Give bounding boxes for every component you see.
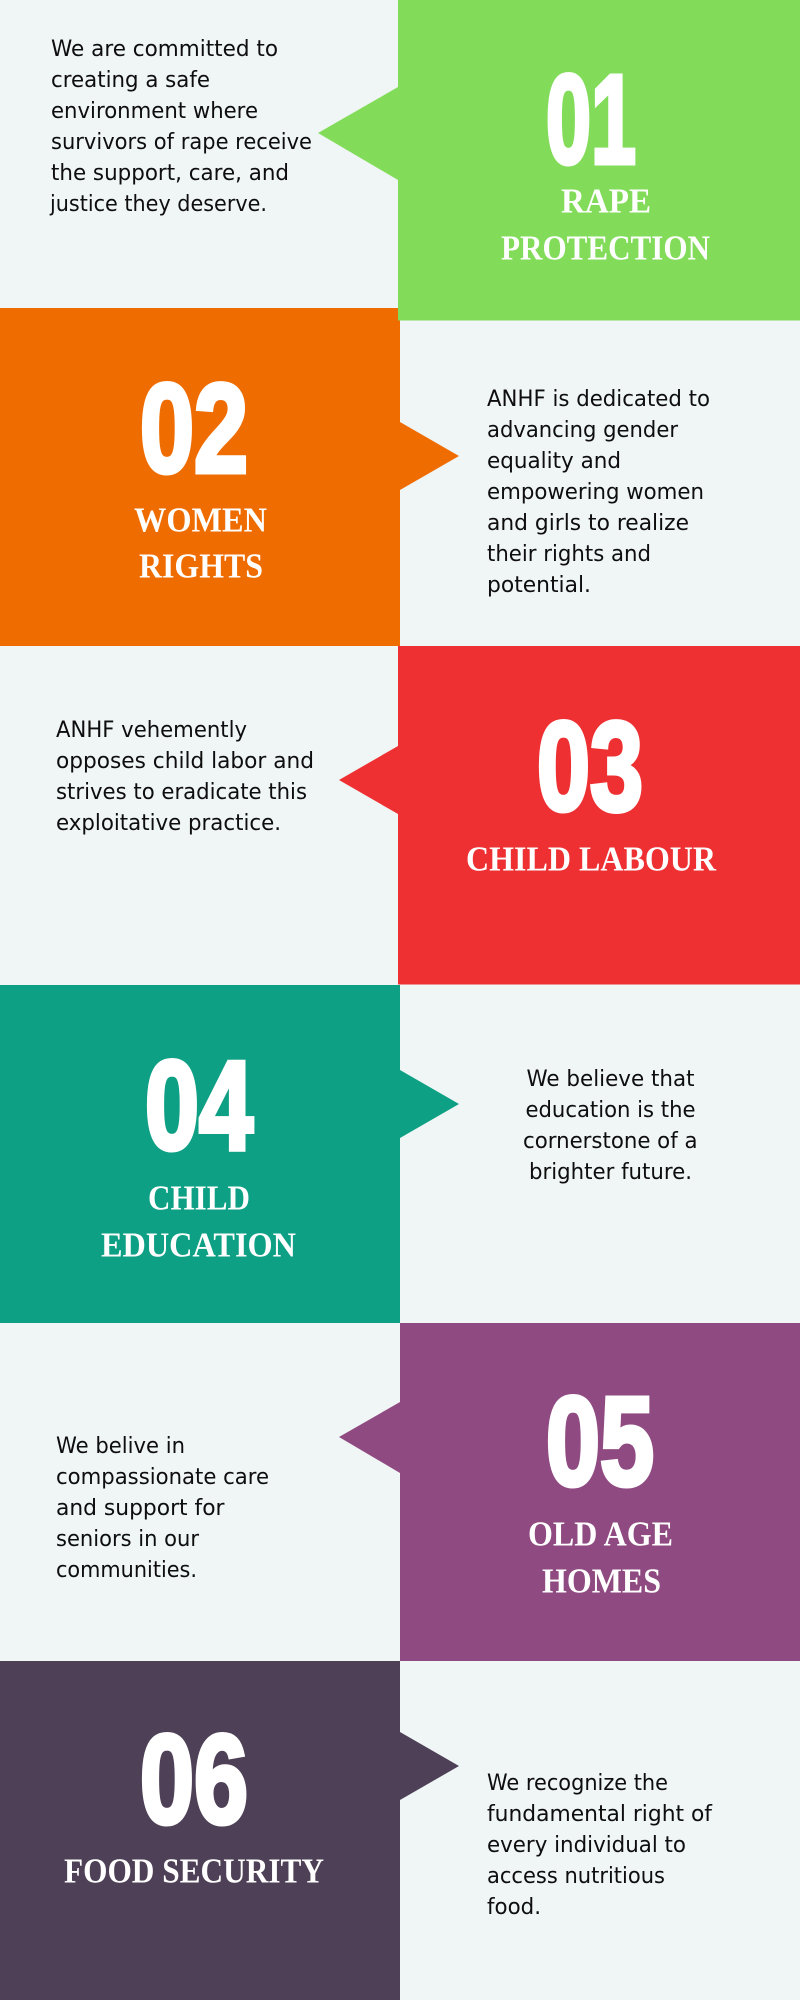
number 02: 02 xyxy=(140,358,248,499)
text block: women rights description: their rights and xyxy=(487,541,651,567)
heading: women rights: WOMEN xyxy=(134,500,267,540)
heading: rape protection: PROTECTION xyxy=(501,228,710,268)
text block: women rights description: potential. xyxy=(487,572,591,598)
text block: child labour description: exploitative practice. xyxy=(56,810,281,836)
text block: rape protection description: creating a safe xyxy=(51,67,210,93)
number 03: 03 xyxy=(537,696,643,837)
text block: rape protection description: We are committed to xyxy=(51,36,278,62)
heading: old age homes xyxy=(528,1514,673,1600)
text block: rape protection description: survivors of rape receive xyxy=(51,129,312,155)
teal block with arrow xyxy=(0,985,459,1323)
text block: food security description xyxy=(487,1770,713,1920)
text block: women rights description: and girls to realize xyxy=(487,510,689,536)
heading: women rights: RIGHTS xyxy=(139,546,263,586)
text block: women rights description: ANHF is dedicated to xyxy=(487,386,710,412)
orange block with arrow xyxy=(0,308,459,646)
text block: child education description: brighter future. xyxy=(529,1159,692,1185)
heading: women rights xyxy=(134,500,267,586)
text block: food security description: fundamental right of xyxy=(487,1801,713,1827)
text block: women rights description xyxy=(487,386,710,598)
text block: women rights description: empowering women xyxy=(487,479,704,505)
dark block with arrow xyxy=(0,1661,459,2000)
text block: food security description: access nutritious xyxy=(487,1863,665,1889)
heading: old age homes: OLD AGE xyxy=(528,1514,673,1554)
purple block with arrow xyxy=(339,1323,800,1661)
text block: child education description xyxy=(523,1066,698,1185)
heading: child education: CHILD xyxy=(148,1178,250,1218)
number 06: 06 xyxy=(140,1709,248,1850)
number 01: 01 xyxy=(546,49,636,190)
heading: rape protection xyxy=(501,182,710,268)
red block with arrow xyxy=(339,646,800,984)
text block: old age homes description: seniors in our xyxy=(56,1526,200,1552)
text block: food security description: every individual to xyxy=(487,1832,686,1858)
heading: old age homes: HOMES xyxy=(542,1562,661,1600)
text block: child labour description: strives to eradicate this xyxy=(56,779,307,805)
text block: old age homes description: and support for xyxy=(56,1495,225,1521)
text block: rape protection description: the support, care, and xyxy=(51,160,289,186)
text block: child labour description xyxy=(56,717,314,836)
panel: 01 rape protection xyxy=(49,0,800,320)
text block: child labour description: ANHF vehemently xyxy=(56,717,247,743)
text block: child education description: cornerstone of a xyxy=(523,1128,698,1154)
heading: child education: EDUCATION xyxy=(101,1226,296,1264)
text block: food security description: food. xyxy=(487,1894,541,1920)
heading: food security: FOOD SECURITY xyxy=(64,1852,324,1890)
panel: 04 child education xyxy=(0,985,698,1323)
green block with arrow xyxy=(318,0,800,320)
text block: rape protection description: environment where xyxy=(51,98,258,124)
heading: child education xyxy=(101,1178,296,1264)
text block: food security description: We recognize the xyxy=(487,1770,668,1796)
panel: 03 child labour xyxy=(56,646,800,984)
text block: rape protection description xyxy=(49,36,312,217)
text block: old age homes description xyxy=(56,1433,269,1583)
text block: rape protection description: justice they deserve. xyxy=(49,191,267,217)
number 04: 04 xyxy=(145,1035,253,1176)
text block: old age homes description: communities. xyxy=(56,1557,197,1583)
text block: old age homes description: compassionate care xyxy=(56,1464,269,1490)
heading: rape protection: RAPE xyxy=(561,182,651,220)
number 05: 05 xyxy=(546,1371,654,1512)
text block: old age homes description: We belive in xyxy=(56,1433,185,1459)
text block: women rights description: equality and xyxy=(487,448,621,474)
panel: 05 old age homes xyxy=(56,1323,800,1661)
heading: child labour: CHILD LABOUR xyxy=(466,840,717,878)
panel: 06 food security xyxy=(0,1661,713,2000)
text block: child education description: We believe that xyxy=(526,1066,695,1092)
text block: child labour description: opposes child labor and xyxy=(56,748,314,774)
panel: 02 women rights xyxy=(0,308,710,646)
text block: child education description: education is the xyxy=(526,1097,696,1123)
text block: women rights description: advancing gender xyxy=(487,417,679,443)
